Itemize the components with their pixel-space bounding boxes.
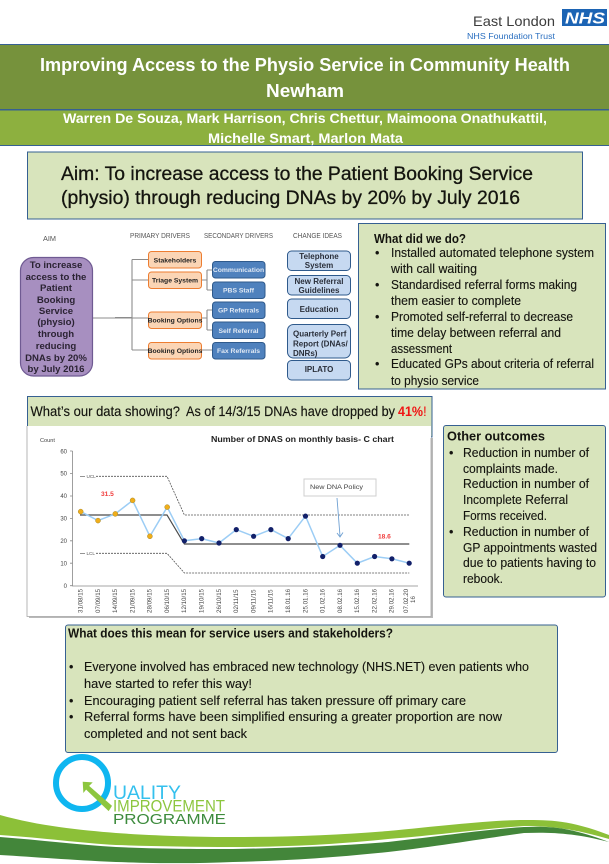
callout: new DNA policy: New DNA Policy [310,484,364,491]
axes: 40 [60,494,68,500]
panel: what this means for service users and stakeholders: • [69,710,73,724]
column headings [43,231,342,243]
date axis labels: 25.01.16 [302,588,309,613]
mean labels: 31.5 [101,491,114,498]
panel: what this means for service users and stakeholders: Encouraging patient self referral has taken pressure off primary care [84,694,466,708]
panel: what this means for service users and stakeholders: completed and not sent back [84,727,248,741]
panel: data heading [28,396,432,437]
aim box: To increase [30,260,82,271]
change ideas: IPLATO [305,365,333,374]
connector lines [93,260,212,350]
aim box: (physio) [37,317,75,328]
logo: quality improvement programme: IMPROVEMENT [113,797,225,816]
panel: other outcomes: rebook. [463,572,503,586]
panel: other outcomes: Reduction in number of [463,525,589,539]
aim box: by July 2016 [27,364,85,375]
axes: 30 [60,516,68,522]
aim box: access to the [26,272,86,283]
logo: East London NHS Foundation Trust: East London [473,13,555,29]
logo: quality improvement programme: PROGRAMME [113,811,226,828]
change ideas: System [305,261,333,270]
change ideas [288,251,350,380]
date axis labels: 15.02.16 [354,588,361,613]
mean labels [101,491,391,541]
primary drivers [148,252,203,359]
panel: other outcomes: Reduction in number of [463,477,589,491]
aim box: Service [39,306,73,317]
panel: other outcomes [444,426,606,597]
primary drivers: Stakeholders [154,258,197,264]
panel: what did we do: Installed automated telephone system [391,246,594,260]
panel: what this means for service users and stakeholders: • [69,660,73,674]
date axis labels: 06/10/15 [164,588,171,613]
aim box [20,258,92,376]
panel: what did we do [358,224,606,389]
data line [81,500,409,563]
secondary drivers [212,262,265,359]
date axis labels: 08.02.16 [337,588,344,613]
panel: data heading: ! [423,404,427,419]
panel: what this means for service users and stakeholders: have started to refer this way! [84,677,252,691]
panel: data heading: As of 14/3/15 DNAs have dropped by [186,403,395,419]
change ideas: Quarterly Perf [293,330,347,338]
panel: data heading: 41% [398,404,423,419]
panel: what did we do: assessment [391,342,452,356]
title banner [0,44,609,110]
panel: what did we do: to physio service [391,374,479,388]
c chart of monthly DNAs [27,426,433,618]
date axis labels: 18.01.16 [285,588,292,613]
date axis labels: 16 [410,596,417,603]
panel: other outcomes: Reduction in number of [463,446,589,460]
date axis labels: 16/11/15 [268,589,275,613]
panel: other outcomes: due to patients having to [463,556,596,570]
date axis labels: 28/09/15 [147,588,154,613]
authors banner: Michelle Smart, Marlon Mata [208,131,404,146]
logo: East London NHS Foundation Trust: NHS [565,10,606,28]
logo: quality improvement programme [56,757,226,828]
aim statement panel: (physio) through reducing DNAs by 20% by July 2016 [61,187,520,209]
decorative green swoosh [0,815,609,863]
logo: East London NHS Foundation Trust: NHS Foundation Trust [467,31,556,41]
aim box: reducing [36,341,76,352]
panel: what did we do: Promoted self-referral to decrease [391,310,573,324]
change ideas: Telephone [299,252,339,261]
panel: other outcomes: Other outcomes [447,429,545,444]
title banner: Improving Access to the Physio Service in Community Health [40,54,570,75]
panel: what did we do: • [375,246,379,260]
aim box: Booking [37,295,75,306]
secondary drivers: Communication [213,267,264,274]
secondary drivers: Fax Referrals [217,348,260,355]
title banner: Newham [266,80,344,101]
mean labels: 18.6 [378,534,391,541]
panel: what did we do: time delay between referral and [391,326,561,340]
date axis labels: 21/09/15 [129,588,136,613]
logo: East London NHS Foundation Trust [467,9,607,41]
date axis labels: 26/10/15 [216,588,223,613]
secondary drivers: GP Referrals [218,308,259,314]
panel: what this means for service users and stakeholders: Referral forms have been simplified ensuring a greater proportion are now [84,710,503,724]
column headings: PRIMARY DRIVERS [130,231,190,240]
column headings: SECONDARY DRIVERS [204,231,273,240]
arrow: policy pointer [337,498,343,537]
panel: other outcomes: Forms received. [463,509,547,523]
primary drivers: Booking Options [148,318,203,324]
secondary drivers: Self Referral [218,328,259,335]
driver diagram [20,231,350,380]
panel: other outcomes: GP appointments wasted [463,541,597,555]
panel: what did we do: Educated GPs about criteria of referral [391,357,594,371]
primary drivers: Booking Options [148,348,203,355]
change ideas: Report (DNAs/ [293,340,348,348]
primary drivers: Triage System [152,278,198,284]
date axis labels: 29.02.16 [389,588,396,613]
panel: what this means for service users and stakeholders: • [69,694,73,708]
panel: what did we do: What did we do? [374,231,466,246]
aim statement panel [28,152,582,219]
column headings: CHANGE IDEAS [293,231,342,240]
panel: what did we do: • [375,310,379,324]
axes: 10 [60,562,68,568]
panel: what this means for service users and stakeholders: Everyone involved has embraced new technology (NHS.NET) even patients who [84,660,529,674]
panel: what did we do: them easier to complete [391,294,521,308]
panel: other outcomes: • [449,446,453,460]
date axis labels: 07/09/15 [95,588,102,613]
panel: other outcomes: Incomplete Referral [463,493,568,507]
axes: 0 [64,584,68,590]
authors banner [0,110,609,146]
baseline points [78,498,170,539]
panel: what did we do: Standardised referral forms making [391,278,577,292]
date axis labels: 12/10/15 [181,588,188,613]
aim box: DNAs by 20% [25,353,87,364]
aim statement panel: Aim: To increase access to the Patient Booking Service [61,163,533,185]
panel: what did we do: • [375,357,379,371]
panel: what this means for service users and stakeholders: What does this mean for service users and stakeholders? [68,626,393,641]
axes: 20 [60,539,68,545]
chart title: Number of DNAS on monthly basis- C chart [211,434,394,444]
panel: what did we do: • [375,278,379,292]
panel: other outcomes: • [449,525,453,539]
column headings: AIM [43,234,56,243]
axes: 60 [60,450,68,456]
date axis labels: 19/10/15 [198,588,206,613]
c chart of monthly DNAs: UCL [86,474,96,479]
date axis labels: 31/08/15 [78,588,84,613]
authors banner: Warren De Souza, Mark Harrison, Chris Chettur, Maimoona Onathukattil, [63,111,547,126]
axes: 50 [60,472,68,478]
panel: other outcomes: complaints made. [463,462,558,476]
date axis labels [78,588,417,613]
callout: new DNA policy [304,479,376,496]
change ideas: DNRs) [293,349,318,358]
change ideas: Guidelines [299,286,340,295]
logo: quality improvement programme: UALITY [113,782,181,804]
c chart of monthly DNAs: Count [40,438,55,444]
panel: data heading: What’s our data showing? [30,403,180,419]
axes [60,450,418,590]
change ideas: Education [300,305,338,314]
date axis labels: 09/11/15 [250,589,257,613]
panel: what did we do: with call waiting [390,262,477,276]
post-change points [182,514,412,566]
date axis labels: 07.02.20 [403,588,410,613]
date axis labels: 01.02.16 [320,588,326,613]
panel: what this means for service users and stakeholders [66,625,558,752]
date axis labels: 02/11/15 [233,589,240,613]
aim box: through [38,329,74,340]
control limit lines [80,476,409,573]
c chart of monthly DNAs: LCL [86,551,95,556]
aim box: Patient [40,283,73,294]
date axis labels: 22.02.16 [371,588,378,613]
change ideas: New Referral [295,277,343,286]
secondary drivers: PBS Staff [223,288,255,294]
icon: green arrow [84,782,111,810]
date axis labels: 14/09/15 [112,588,119,613]
